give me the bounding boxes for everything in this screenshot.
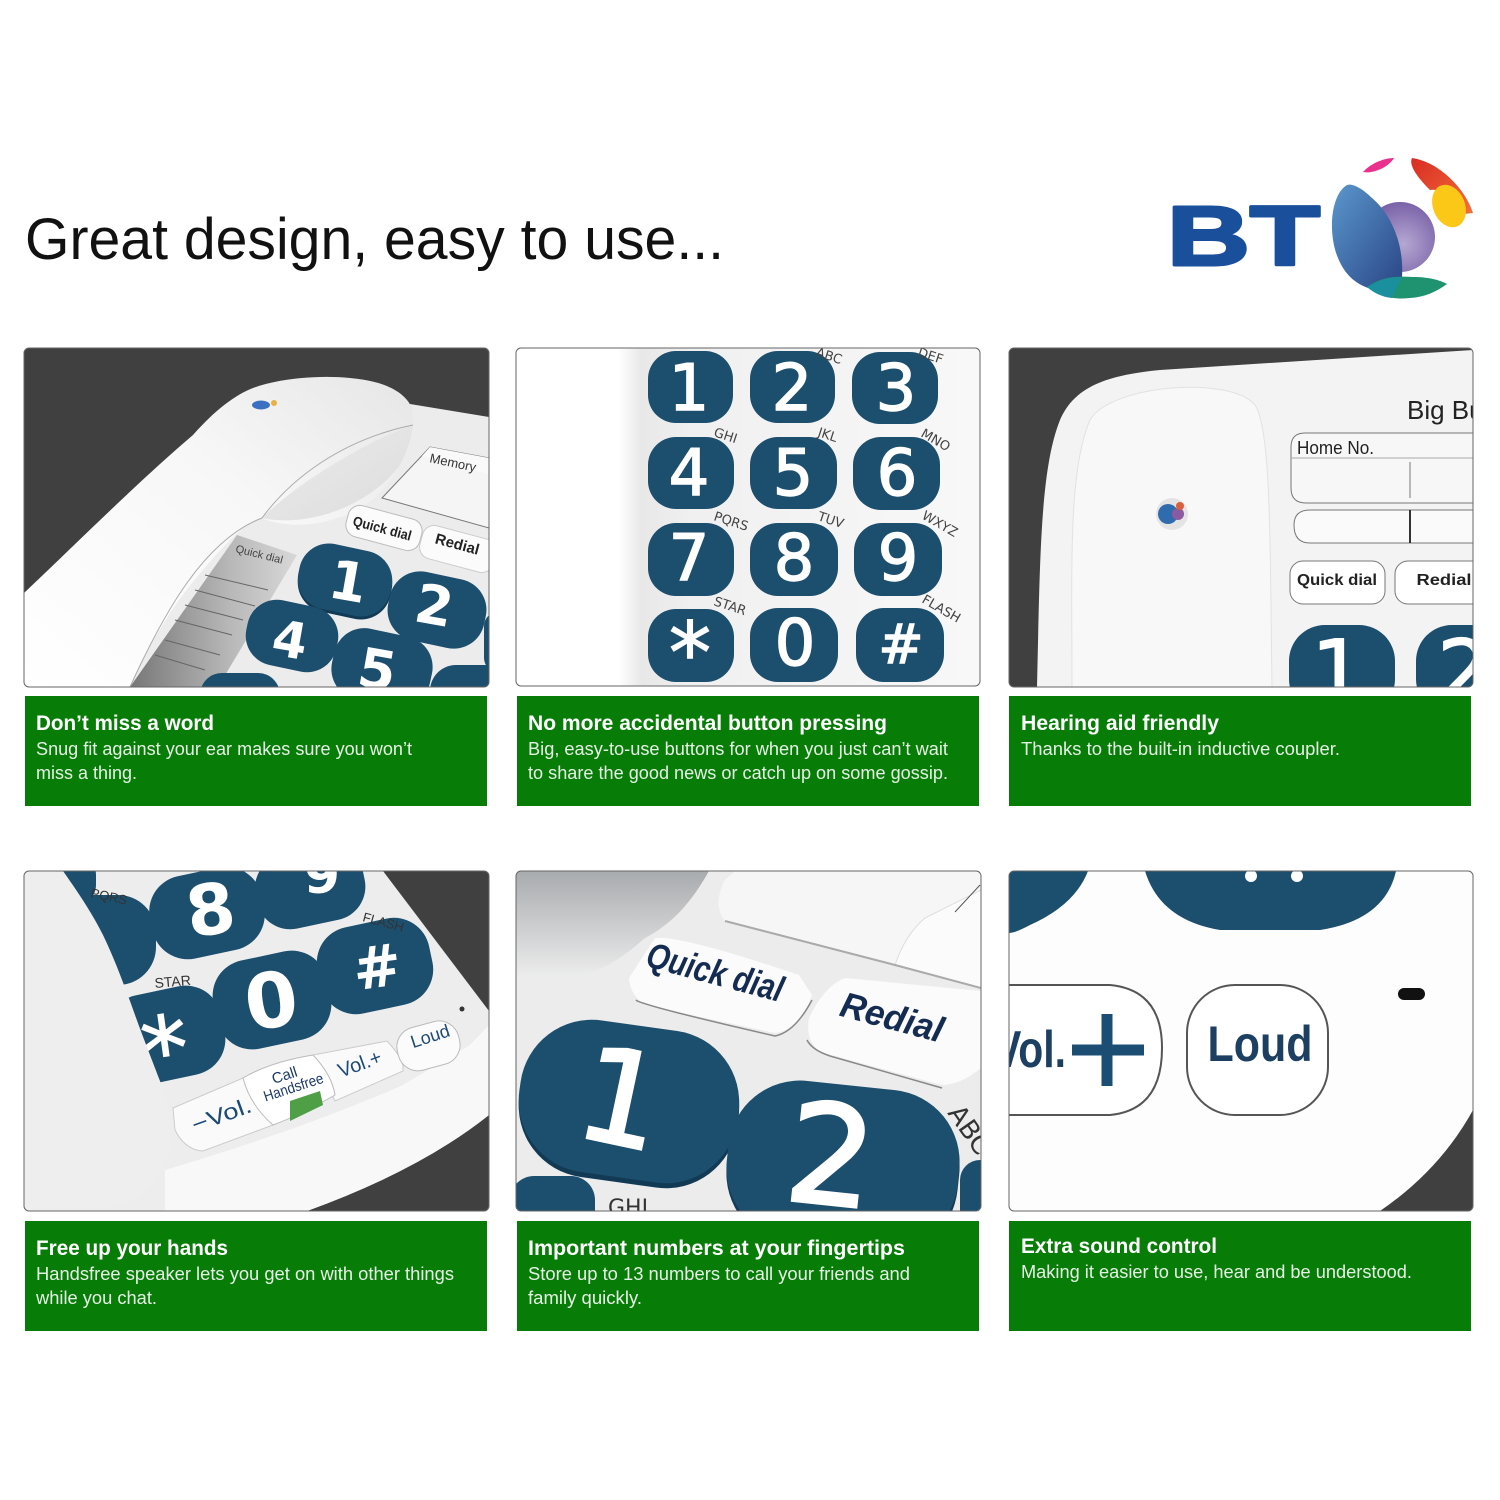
logo dot: [252, 400, 277, 410]
panel: keypad photo: 5: [773, 437, 813, 511]
panel: keypad photo: 0: [775, 607, 815, 681]
panel: keypad photo: 3: [876, 352, 916, 426]
panel: handsfree photo: 0: [239, 953, 304, 1049]
number label card: [130, 535, 297, 687]
panel: handsfree photo: Handsfree: [262, 1070, 326, 1105]
panel: keypad photo: TUV: [815, 509, 846, 532]
panel: handsfree photo: −Vol.: [188, 1093, 255, 1137]
panel: handsfree photo: Loud: [408, 1021, 452, 1052]
small buttons: [173, 1078, 273, 1151]
panel: keypad photo: 7: [669, 522, 709, 596]
icon: BT logo: [1167, 158, 1473, 299]
panel: keypad photo: DEF: [916, 346, 945, 368]
panel: handsfree photo: #: [348, 930, 406, 1004]
caption: hearing aid friendly: Hearing aid friendly: [1021, 711, 1219, 735]
panel: handset photo: Quick dial: [351, 513, 413, 544]
panel: handsfree photo: STAR: [154, 972, 191, 991]
panel: quick dial photo: ABC: [941, 1100, 996, 1161]
panel: keypad photo: JKL: [815, 425, 840, 446]
panel: keypad photo: *: [669, 604, 711, 702]
panel: handset photo: 5: [353, 635, 401, 704]
caption: no more accidental button pressing: to share the good news or catch up on some gossip.: [528, 763, 948, 783]
panel: keypad photo: FLASH: [919, 592, 963, 626]
caption: important numbers at your fingertips: Store up to 13 numbers to call your friends and: [528, 1264, 910, 1284]
panel: handsfree photo: Call: [270, 1064, 300, 1088]
panel: keypad photo: #: [878, 613, 924, 676]
logo dot: [1156, 498, 1188, 530]
panel: handset photo: 2: [410, 571, 458, 640]
panel: handsfree photo: Vol.+: [335, 1046, 385, 1082]
panel: keypad photo: 9: [878, 522, 918, 596]
panel: keypad photo: 1: [669, 352, 709, 426]
caption: don't miss a word: miss a thing.: [36, 763, 137, 783]
panel: quick dial photo: 1: [565, 1016, 678, 1182]
panel: hearing aid photo: 2: [1437, 622, 1491, 720]
panel: keypad photo: 6: [877, 437, 917, 511]
panel: keypad photo: [626, 348, 961, 686]
icon: BT logo: BT: [1167, 189, 1320, 283]
panel: loud button photo: Vol.: [994, 1021, 1066, 1079]
keys: [202, 544, 488, 686]
panel: handsfree photo: FLASH: [361, 909, 406, 935]
panel: hearing aid photo: Home No.: [1297, 438, 1374, 458]
panel: handset photo: Redial: [433, 531, 481, 559]
caption: no more accidental button pressing: Big, easy-to-use buttons for when you just can’t wait: [528, 739, 948, 759]
panel: keypad photo: GHI: [712, 426, 739, 447]
handset: [24, 377, 413, 687]
caption: free up your hands: [25, 1221, 487, 1331]
caption: free up your hands: while you chat.: [35, 1288, 157, 1308]
caption: free up your hands: Free up your hands: [36, 1236, 228, 1260]
caption: hearing aid friendly: [1009, 696, 1471, 806]
panel: handset photo: 1: [324, 547, 372, 616]
panel: handset photo: [24, 348, 488, 686]
panel: keypad photo: 4: [669, 437, 709, 511]
panel: hearing aid photo: Quick dial: [1297, 572, 1377, 589]
panel: handsfree photo: 8: [181, 866, 240, 954]
panel: quick dial photo: GHI: [608, 1196, 648, 1221]
panel: quick dial photo: 2: [779, 1072, 883, 1241]
panel: keypad photo: ABC: [814, 346, 844, 368]
caption: important numbers at your fingertips: family quickly.: [528, 1288, 642, 1308]
panel: handsfree photo: [24, 839, 489, 1211]
caption: extra sound control: Extra sound control: [1021, 1234, 1217, 1258]
panel: handset photo: Memory: [428, 450, 478, 475]
panel: loud button photo: Loud: [1208, 1016, 1312, 1072]
panel: keypad photo: MNO: [918, 426, 953, 455]
panel: loud button photo: [994, 870, 1473, 1211]
handset edge: [46, 872, 160, 1084]
small buttons: [345, 504, 423, 552]
panel: keypad photo: STAR: [712, 595, 748, 619]
panel: hearing aid photo: [1010, 348, 1472, 686]
panel: keypad photo: PQRS: [712, 510, 750, 535]
panel: keypad photo: 2: [772, 352, 812, 426]
panel: quick dial photo: [516, 872, 980, 1210]
panel: handsfree photo: 9: [304, 846, 340, 906]
panel: hearing aid photo: 1: [1311, 622, 1365, 720]
panel: handset photo: 4: [268, 609, 312, 672]
panel: hearing aid photo: Redial: [1416, 572, 1472, 589]
caption: important numbers at your fingertips: Important numbers at your fingertips: [528, 1236, 905, 1260]
caption: important numbers at your fingertips: [517, 1221, 979, 1331]
caption: extra sound control: [1009, 1221, 1471, 1331]
caption: hearing aid friendly: Thanks to the built-in inductive coupler.: [1021, 739, 1340, 759]
caption: don't miss a word: [25, 696, 487, 806]
caption: free up your hands: Handsfree speaker lets you get on with other things: [36, 1264, 454, 1284]
panel: keypad photo: 8: [774, 522, 814, 596]
caption: no more accidental button pressing: [517, 696, 979, 806]
panel: quick dial photo: Quick dial: [642, 934, 789, 1010]
caption: extra sound control: Making it easier to use, hear and be understood.: [1021, 1262, 1412, 1282]
panel: keypad photo: WXYZ: [919, 508, 960, 541]
panel: handsfree photo: *: [135, 995, 196, 1107]
number label card: Quick dial: [234, 543, 284, 567]
caption: don't miss a word: Snug fit against your ear makes sure you won’t: [36, 739, 412, 759]
title: Great design, easy to use...: [25, 207, 724, 272]
panel: quick dial photo: Redial: [836, 984, 949, 1051]
caption: don't miss a word: Don’t miss a word: [36, 711, 214, 735]
panel: handsfree photo: PQRS: [89, 885, 129, 908]
caption: no more accidental button pressing: No more accidental button pressing: [528, 711, 887, 735]
